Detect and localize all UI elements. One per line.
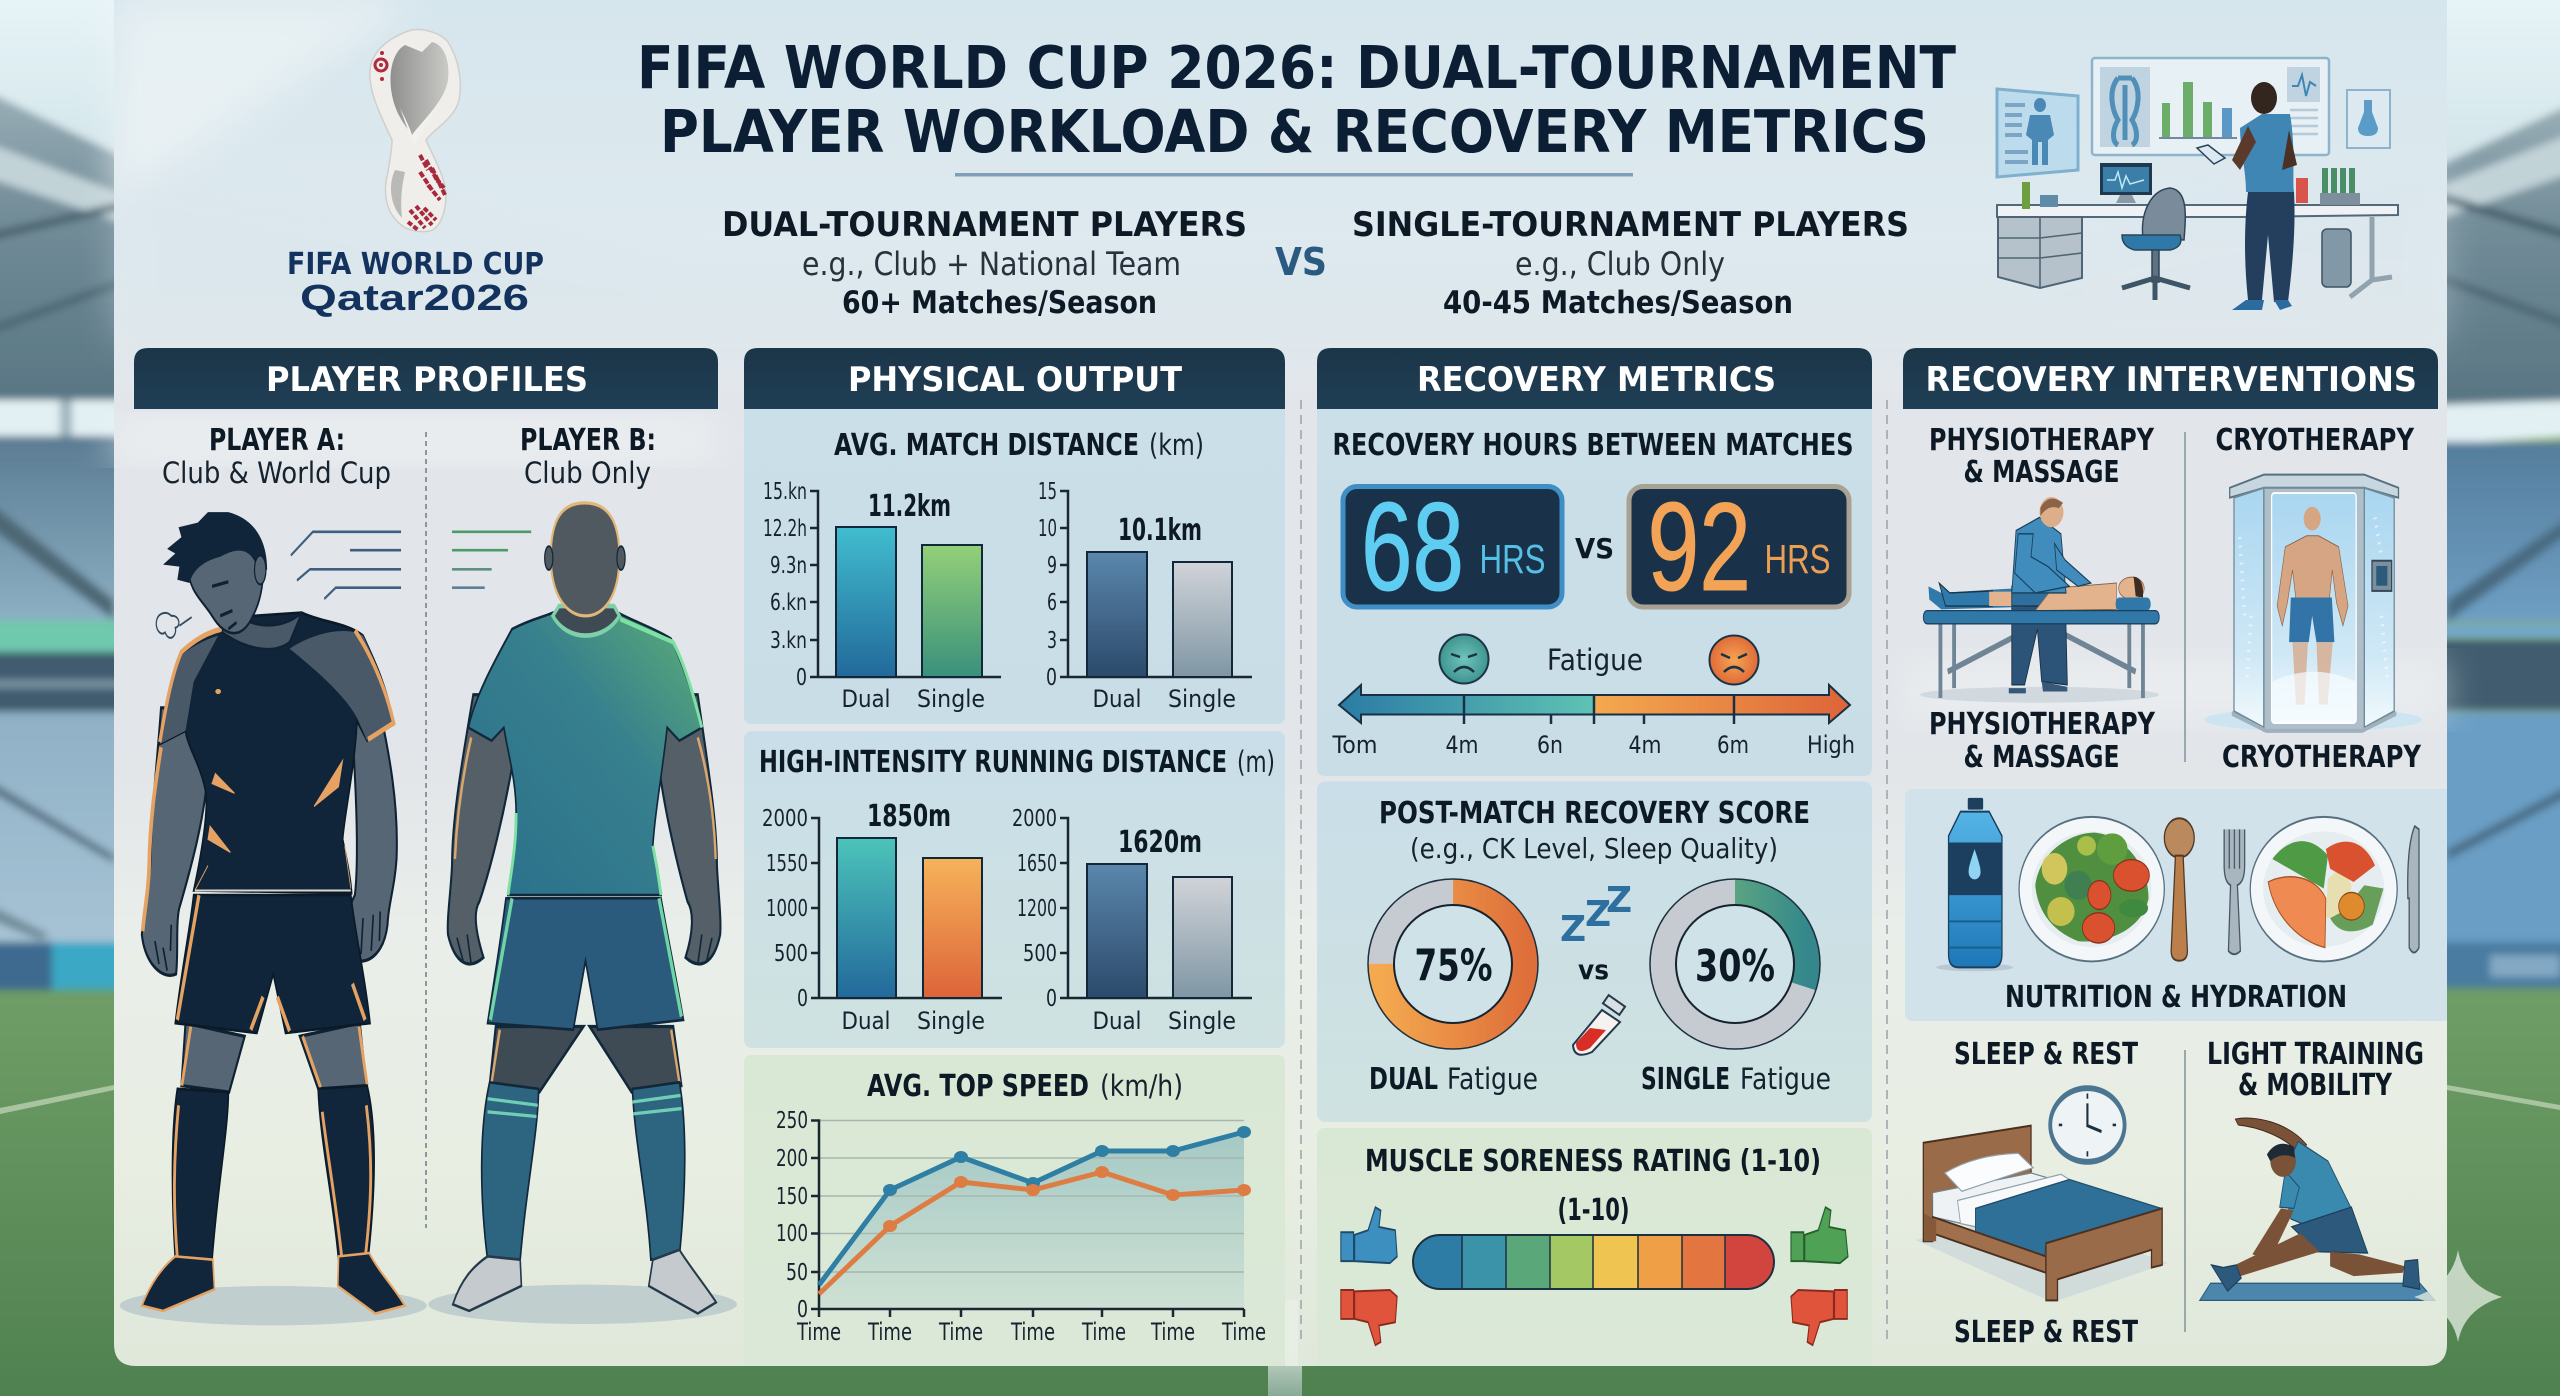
donut chart: dual fatigue 75% bbox=[1368, 879, 1538, 1049]
bar chart: high-intensity dual vs single: 2000 bbox=[762, 806, 808, 832]
header: physical output bbox=[744, 348, 1285, 409]
header: recovery metrics bbox=[1317, 348, 1872, 409]
bar chart: match distance dual vs single: Dual bbox=[842, 685, 890, 713]
icon: fork bbox=[2224, 829, 2245, 954]
icon: unhappy face teal bbox=[1440, 634, 1488, 684]
VS label: VS bbox=[1275, 240, 1327, 284]
line chart: top speed over time: 200 bbox=[776, 1146, 808, 1172]
heading: light training & mobility: & MOBILITY bbox=[2238, 1068, 2393, 1103]
line chart: top speed over time: 100 bbox=[776, 1221, 808, 1247]
illustration: fresh player B bbox=[428, 503, 737, 1324]
line chart: top speed over time: Time bbox=[1081, 1318, 1126, 1346]
comparison: dual-tournament players: e.g., Club + National Team bbox=[802, 245, 1181, 283]
caption: single fatigue: Fatigue bbox=[1740, 1062, 1831, 1096]
sleep icon: Zzz: Z bbox=[1585, 894, 1611, 935]
bar chart: match distance dual vs single: Single bbox=[917, 685, 985, 713]
illustration: bed and clock bbox=[1916, 1088, 2168, 1302]
monitor bbox=[2100, 163, 2152, 203]
icon: thumbs down red left bbox=[1341, 1290, 1397, 1345]
comparison: single-tournament players: 40-45 Matches/Season bbox=[1443, 285, 1793, 321]
heading: physiotherapy & massage bottom: PHYSIOTHERAPY bbox=[1929, 707, 2156, 742]
sub-panel: recovery hours between matches bbox=[1317, 409, 1872, 776]
comparison: dual-tournament players bbox=[722, 205, 1247, 321]
bar chart: match distance comparison: 10.1km bbox=[1118, 513, 1202, 548]
sub-panel: recovery hours between matches: RECOVERY HOURS BETWEEN MATCHES bbox=[1332, 428, 1854, 463]
label: player B: Club Only bbox=[524, 456, 651, 490]
line chart: top speed over time: 50 bbox=[786, 1260, 808, 1286]
header: recovery metrics: RECOVERY METRICS bbox=[1417, 360, 1776, 400]
sub-panel: avg. match distance: AVG. MATCH DISTANCE bbox=[834, 428, 1139, 463]
icon: knife bbox=[2408, 826, 2419, 953]
line chart: top speed over time: Time bbox=[1150, 1318, 1195, 1346]
sub-panel: muscle soreness rating bbox=[1317, 1128, 1872, 1366]
sub-panel: post-match recovery score: POST-MATCH RECOVERY SCORE bbox=[1379, 796, 1810, 831]
heading: sleep & rest bottom: SLEEP & REST bbox=[1954, 1315, 2138, 1350]
sub-panel: post-match recovery score: (e.g., CK Level, Sleep Quality) bbox=[1410, 832, 1778, 865]
digital display: 92 hrs bbox=[1629, 478, 1849, 617]
sub-panel: avg. top speed bbox=[744, 1055, 1285, 1366]
sub-panel: nutrition & hydration bbox=[1905, 789, 2447, 1021]
line chart: top speed over time: Time bbox=[867, 1318, 912, 1346]
sub-panel: high-intensity running distance: (m) bbox=[1237, 745, 1275, 779]
logo: FIFA World Cup emblem bbox=[287, 30, 544, 318]
title: FIFA WORLD CUP 2026: DUAL-TOURNAMENT bbox=[637, 33, 1956, 102]
digital display: 92 hrs: HRS bbox=[1764, 536, 1830, 582]
caption: dual fatigue: DUAL bbox=[1369, 1062, 1438, 1097]
label: player B bbox=[520, 423, 656, 490]
panel: player profiles bbox=[120, 348, 737, 1325]
bar chart: high-intensity comparison: 500 bbox=[1023, 941, 1057, 967]
icon: blood test tube bbox=[1573, 995, 1625, 1055]
bar chart: match distance comparison: 6 bbox=[1047, 590, 1057, 616]
desk drawers bbox=[1998, 217, 2082, 288]
sub-panel: avg. match distance: (km) bbox=[1149, 428, 1204, 462]
bar chart: high-intensity dual vs single: Dual bbox=[842, 1007, 890, 1035]
caption: single fatigue bbox=[1641, 1062, 1831, 1097]
icon: wooden spoon bbox=[2164, 818, 2194, 961]
sub-panel: avg. match distance bbox=[744, 409, 1285, 724]
bar chart: match distance comparison: 10 bbox=[1038, 516, 1057, 542]
sub-panel: avg. top speed: (km/h) bbox=[1100, 1069, 1183, 1103]
icon: salad plate bbox=[2019, 817, 2164, 961]
heading: physiotherapy & massage top: & MASSAGE bbox=[1964, 455, 2120, 490]
label: player A: Club & World Cup bbox=[162, 456, 391, 490]
fatigue scale arrow: 4m bbox=[1628, 731, 1662, 759]
bar chart: match distance comparison: 15 bbox=[1038, 479, 1057, 505]
donut chart: single fatigue 30% bbox=[1650, 879, 1820, 1049]
sub-panel: post-match recovery score bbox=[1317, 782, 1872, 1122]
sleep icon: Zzz: Z bbox=[1606, 880, 1632, 921]
line chart: top speed over time: 0 bbox=[797, 1297, 808, 1323]
sub-panel: high-intensity running distance bbox=[744, 731, 1285, 1048]
bar chart: match distance comparison: 9 bbox=[1047, 553, 1057, 579]
caption: dual fatigue: Fatigue bbox=[1447, 1062, 1538, 1096]
heading: cryotherapy top: CRYOTHERAPY bbox=[2216, 423, 2415, 458]
sub-panel: muscle soreness rating: (1-10) bbox=[1558, 1193, 1630, 1228]
heading: sleep & rest top: SLEEP & REST bbox=[1954, 1037, 2138, 1072]
panel: physical output bbox=[744, 348, 1285, 1366]
vs label: vs bbox=[1578, 955, 1609, 986]
bar chart: high-intensity comparison: 1200 bbox=[1017, 896, 1057, 922]
office chair bbox=[2122, 188, 2190, 300]
desk items bbox=[2022, 168, 2392, 297]
caption: dual fatigue bbox=[1369, 1062, 1538, 1097]
logo wordmark: Qatar2026 bbox=[300, 277, 529, 318]
icon: wall clock bbox=[2050, 1088, 2125, 1162]
icon: thumbs up blue bbox=[1341, 1207, 1397, 1263]
icon: thumbs down red right bbox=[1791, 1290, 1847, 1345]
fatigue scale arrow: 6n bbox=[1537, 731, 1563, 759]
illustration: massage table bbox=[1920, 497, 2159, 703]
VS label: VS bbox=[1575, 532, 1614, 565]
bar chart: high-intensity comparison: 1650 bbox=[1017, 851, 1057, 877]
label: player A bbox=[162, 423, 391, 490]
sub-panel: muscle soreness rating: MUSCLE SORENESS RATING (1-10) bbox=[1365, 1144, 1821, 1179]
comparison: dual-tournament players: 60+ Matches/Season bbox=[842, 285, 1157, 321]
illustration: cryotherapy chamber bbox=[2204, 475, 2422, 733]
heading: physiotherapy & massage top bbox=[1929, 423, 2155, 490]
bar chart: high-intensity dual vs single: Single bbox=[917, 1007, 985, 1035]
panel: recovery interventions bbox=[1903, 348, 2447, 1350]
digital display: 68 hrs bbox=[1343, 478, 1562, 617]
heading: physiotherapy & massage top: PHYSIOTHERAPY bbox=[1929, 423, 2155, 458]
title: PLAYER WORKLOAD & RECOVERY METRICS bbox=[660, 97, 1929, 166]
bar chart: match distance comparison bbox=[1038, 479, 1252, 713]
icon: thumbs up green bbox=[1791, 1207, 1848, 1263]
bar chart: match distance dual vs single: 0 bbox=[796, 665, 807, 691]
heading: cryotherapy bottom: CRYOTHERAPY bbox=[2222, 740, 2422, 775]
line chart: top speed over time: Time bbox=[796, 1318, 841, 1346]
panel: recovery metrics bbox=[1317, 348, 1872, 1366]
line chart: top speed over time: Time bbox=[1010, 1318, 1055, 1346]
illustration: stretching athlete bbox=[2200, 1118, 2435, 1300]
bar chart: match distance dual vs single bbox=[763, 479, 1001, 713]
bar chart: high-intensity comparison: 2000 bbox=[1012, 806, 1057, 832]
watermark: sparkle bbox=[2414, 1250, 2502, 1342]
line chart: top speed over time: 150 bbox=[776, 1184, 808, 1210]
digital display: 68 hrs: HRS bbox=[1480, 536, 1546, 582]
label: player A: PLAYER A: bbox=[209, 423, 345, 458]
soreness gradient scale bbox=[1413, 1235, 1774, 1289]
heading: light training & mobility: LIGHT TRAINING bbox=[2207, 1037, 2424, 1072]
bar chart: high-intensity comparison bbox=[1012, 806, 1252, 1035]
fatigue label: Fatigue bbox=[1547, 643, 1643, 677]
donut chart: dual fatigue 75%: 75% bbox=[1414, 940, 1492, 992]
bar chart: match distance comparison: 0 bbox=[1046, 665, 1057, 691]
bar chart: match distance dual vs single: 15.kn bbox=[763, 479, 807, 505]
bar chart: match distance comparison: 3 bbox=[1047, 628, 1057, 654]
header: player profiles: PLAYER PROFILES bbox=[266, 360, 588, 400]
bar chart: high-intensity comparison: Single bbox=[1168, 1007, 1236, 1035]
bar chart: high-intensity dual vs single: 500 bbox=[774, 941, 808, 967]
comparison: single-tournament players: e.g., Club Only bbox=[1515, 245, 1725, 283]
sub-panel: avg. top speed: AVG. TOP SPEED bbox=[867, 1069, 1089, 1104]
bar chart: high-intensity comparison: Dual bbox=[1092, 1007, 1142, 1035]
header: physical output: PHYSICAL OUTPUT bbox=[848, 360, 1183, 400]
bar chart: high-intensity dual vs single: 1000 bbox=[766, 896, 808, 922]
bar chart: high-intensity comparison: 0 bbox=[1046, 986, 1057, 1012]
bar chart: high-intensity dual vs single: 1850m bbox=[867, 799, 951, 834]
comparison: dual-tournament players: DUAL-TOURNAMENT PLAYERS bbox=[722, 205, 1247, 245]
illustration: sports scientist at lab desk bbox=[1997, 58, 2420, 340]
bar chart: match distance comparison: Dual bbox=[1092, 685, 1142, 713]
line chart: top speed over time: Time bbox=[1221, 1318, 1266, 1346]
donut chart: single fatigue 30%: 30% bbox=[1695, 941, 1775, 992]
bar chart: match distance dual vs single: 6.kn bbox=[770, 590, 807, 616]
heading: physiotherapy & massage bottom bbox=[1929, 707, 2156, 775]
sub-panel: nutrition & hydration: NUTRITION & HYDRATION bbox=[2005, 980, 2347, 1015]
scientist figure bbox=[2197, 82, 2297, 310]
line chart: top speed over time: 250 bbox=[776, 1108, 808, 1134]
heading: physiotherapy & massage bottom: & MASSAGE bbox=[1964, 740, 2120, 775]
fatigue scale arrow: 4m bbox=[1446, 731, 1478, 759]
icon: salmon plate bbox=[2250, 817, 2397, 961]
digital display: 68 hrs: 68 bbox=[1361, 478, 1464, 617]
heading: light training & mobility bbox=[2207, 1037, 2424, 1103]
fatigue scale arrow bbox=[1332, 685, 1855, 759]
comparison: single-tournament players: SINGLE-TOURNAMENT PLAYERS bbox=[1352, 205, 1909, 245]
label: player B: PLAYER B: bbox=[520, 423, 656, 458]
line chart: top speed over time bbox=[776, 1108, 1266, 1346]
logo wordmark bbox=[287, 247, 544, 318]
header: recovery interventions bbox=[1903, 348, 2438, 409]
fatigue scale arrow: High bbox=[1807, 731, 1855, 759]
sleep icon: Zzz: Z bbox=[1560, 909, 1586, 950]
bar chart: high-intensity dual vs single bbox=[762, 799, 1002, 1035]
logo wordmark: FIFA WORLD CUP bbox=[287, 247, 544, 282]
fatigue scale arrow: 6m bbox=[1717, 731, 1749, 759]
bar chart: high-intensity dual vs single: 0 bbox=[797, 986, 808, 1012]
line chart: top speed over time: Time bbox=[938, 1318, 983, 1346]
sleep icon: Zzz bbox=[1560, 880, 1632, 950]
bar chart: match distance dual vs single: 9.3n bbox=[770, 553, 807, 579]
bar chart: high-intensity dual vs single: 1550 bbox=[766, 851, 808, 877]
bar chart: high-intensity comparison: 1620m bbox=[1118, 825, 1202, 860]
illustration: nutrition items bbox=[1936, 798, 2419, 971]
icon: angry face orange bbox=[1710, 636, 1758, 684]
header: player profiles bbox=[134, 348, 718, 409]
icon: water bottle bbox=[1936, 798, 2013, 971]
comparison: single-tournament players bbox=[1352, 205, 1909, 321]
bar chart: match distance comparison: Single bbox=[1168, 685, 1236, 713]
sub-panel: high-intensity running distance: HIGH-INTENSITY RUNNING DISTANCE bbox=[759, 745, 1227, 780]
caption: single fatigue: SINGLE bbox=[1641, 1062, 1730, 1097]
title bbox=[637, 33, 1956, 176]
fatigue scale arrow: Tom bbox=[1332, 731, 1378, 759]
digital display: 92 hrs: 92 bbox=[1648, 478, 1751, 617]
bar chart: match distance dual vs single: 3.kn bbox=[770, 628, 807, 654]
header: recovery interventions: RECOVERY INTERVENTIONS bbox=[1926, 360, 2417, 400]
bar chart: match distance dual vs single: 11.2km bbox=[868, 489, 951, 524]
bar chart: match distance dual vs single: 12.2h bbox=[763, 516, 807, 542]
illustration: fatigued player A bbox=[120, 512, 427, 1325]
